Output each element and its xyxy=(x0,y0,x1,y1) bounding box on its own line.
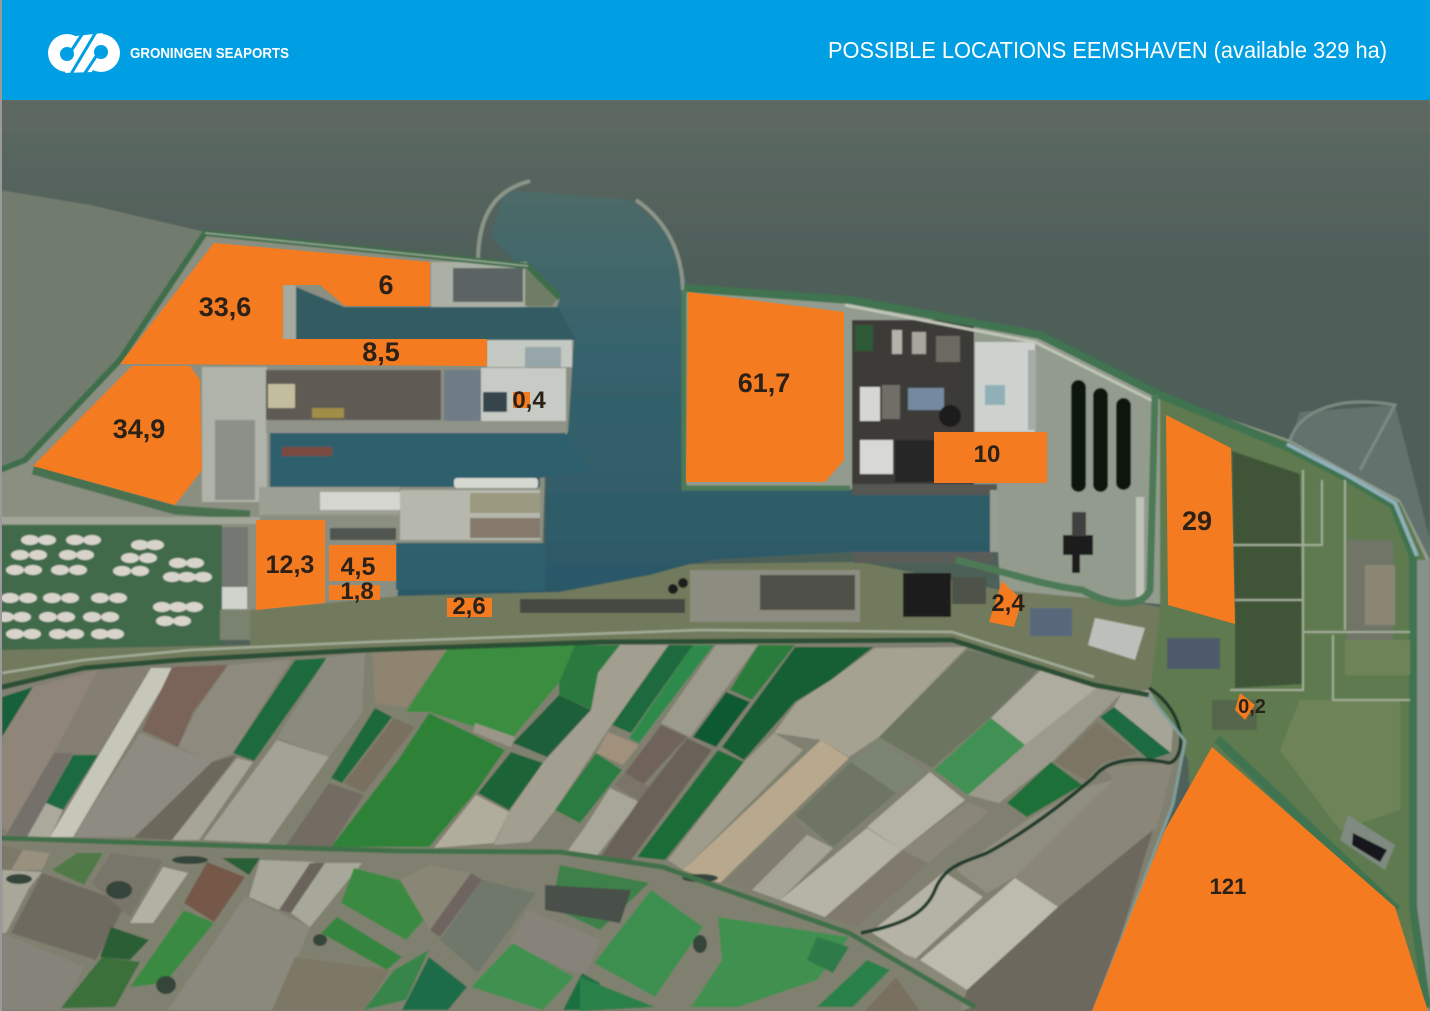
dike west xyxy=(0,233,560,515)
label 12,3: 12,3 xyxy=(266,551,314,579)
label 8,5: 8,5 xyxy=(362,337,400,367)
plot 29 xyxy=(1166,415,1235,624)
west quay details xyxy=(202,262,572,540)
plot 4,5 xyxy=(329,545,396,581)
plot 10 xyxy=(934,432,1047,483)
hectare labels xyxy=(113,270,1266,899)
farmland south fields west xyxy=(0,845,600,1010)
label 10: 10 xyxy=(974,441,1000,468)
plot 121 xyxy=(1092,747,1428,1011)
south quay land strip xyxy=(0,562,1175,697)
far east mudflat xyxy=(1414,560,1430,1011)
farmland south fields east xyxy=(545,865,920,1011)
plant on the east pad xyxy=(1063,512,1093,573)
plot 2,4 xyxy=(989,581,1022,627)
inner harbour pale quay xyxy=(283,285,296,340)
plot 12,3 xyxy=(256,520,325,610)
east port land xyxy=(684,288,1430,700)
east land works xyxy=(1167,540,1410,870)
label 4,5: 4,5 xyxy=(341,553,375,581)
plot 1,8 xyxy=(329,585,380,600)
plot 0,4 xyxy=(513,392,530,408)
plot 2,6 xyxy=(447,598,492,617)
dike east xyxy=(684,288,1427,1008)
label 121: 121 xyxy=(1210,874,1246,899)
label 61,7: 61,7 xyxy=(738,368,790,398)
harbour channel water xyxy=(396,190,995,596)
breakwaters xyxy=(478,181,683,290)
logo wordmark: GRONINGEN SEAPORTS xyxy=(130,45,289,62)
plot 0,2 xyxy=(1235,693,1255,720)
label 29: 29 xyxy=(1182,506,1212,536)
plot 34,9 xyxy=(33,366,202,505)
east plant block xyxy=(852,320,1036,495)
farmland north fields centre and east xyxy=(494,645,1173,1011)
logo mark xyxy=(48,32,120,74)
south quay coal and industry xyxy=(520,570,1145,660)
east land pale roads xyxy=(1230,470,1410,700)
farm clusters xyxy=(6,856,718,994)
orange available plots xyxy=(33,243,1428,1011)
oil tank farm ground xyxy=(0,525,222,650)
east quay basin end xyxy=(854,490,1144,597)
label 2,6: 2,6 xyxy=(452,593,486,620)
west port land xyxy=(0,233,574,625)
west harbour jetty basin xyxy=(396,543,545,590)
tidal flats east xyxy=(1290,405,1430,560)
plot 33,6 / 6 / 8,5 xyxy=(120,243,487,366)
east green land xyxy=(1150,395,1426,1011)
west main harbour basin xyxy=(270,433,590,487)
farmland north fields west xyxy=(2,645,591,848)
plot 61,7 xyxy=(686,292,844,482)
page title: POSSIBLE LOCATIONS EEMSHAVEN (available 329 ha) xyxy=(828,37,1387,63)
east wetlands xyxy=(1232,451,1303,688)
label 0,4: 0,4 xyxy=(512,387,546,414)
label 34,9: 34,9 xyxy=(113,414,165,444)
west inner harbour basin xyxy=(296,287,576,340)
label 0,2: 0,2 xyxy=(1238,696,1266,718)
black tanks xyxy=(1071,380,1131,492)
farmland base xyxy=(0,640,1185,1011)
label 1,8: 1,8 xyxy=(340,578,374,605)
label 2,4: 2,4 xyxy=(991,590,1025,617)
label 6: 6 xyxy=(378,270,394,300)
oil tanks xyxy=(0,535,212,639)
label 33,6: 33,6 xyxy=(199,292,251,322)
outer tidal structure east xyxy=(1290,402,1395,470)
tidal flats west xyxy=(0,190,205,472)
country roads and canals xyxy=(0,630,1397,1011)
road strip beside tank farm xyxy=(0,517,260,640)
